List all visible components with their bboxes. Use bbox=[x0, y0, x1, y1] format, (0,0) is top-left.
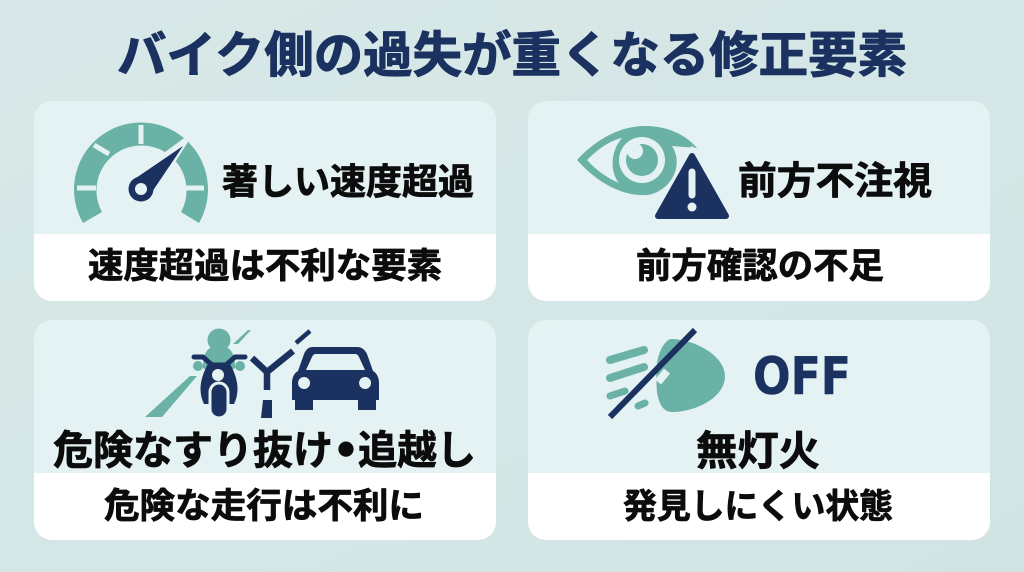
panel: dangerous overtaking bbox=[34, 320, 496, 540]
icon: speedometer bbox=[74, 122, 208, 223]
icon: headlight off bbox=[610, 330, 725, 417]
icon: motorcycle and car bbox=[145, 328, 379, 418]
panel: failure to look ahead bbox=[528, 101, 990, 301]
heading: dangerous overtaking: 危険なすり抜け bbox=[53, 429, 333, 473]
heading: dangerous overtaking: ・ bbox=[326, 429, 366, 473]
heading: failure to look ahead: 前方不注視 bbox=[738, 161, 932, 203]
rider bbox=[193, 328, 245, 374]
caption: speeding: 速度超過は不利な要素 bbox=[88, 247, 442, 286]
icon: eye with warning bbox=[577, 126, 731, 221]
motorcycle bbox=[194, 357, 245, 418]
heading: excessive speeding: 著しい速度超過 bbox=[222, 161, 474, 202]
heading: no lights: 無灯火 bbox=[696, 428, 820, 474]
heading: dangerous overtaking bbox=[53, 429, 476, 473]
road stripes bbox=[145, 330, 251, 417]
caption: dangerous riding: 危険な走行は不利に bbox=[104, 487, 424, 526]
road fork bbox=[252, 331, 310, 390]
caption: insufficient check: 前方確認の不足 bbox=[636, 247, 884, 286]
car bbox=[292, 347, 379, 410]
panel: excessive speeding bbox=[34, 101, 496, 301]
label: OFF: OFF bbox=[753, 347, 851, 407]
title: バイク側の過失が重くなる修正要素 bbox=[117, 29, 907, 83]
heading: dangerous overtaking: 追越し bbox=[358, 429, 476, 473]
panel: no headlight bbox=[528, 320, 990, 540]
caption: hard to spot: 発見しにくい状態 bbox=[623, 488, 893, 526]
